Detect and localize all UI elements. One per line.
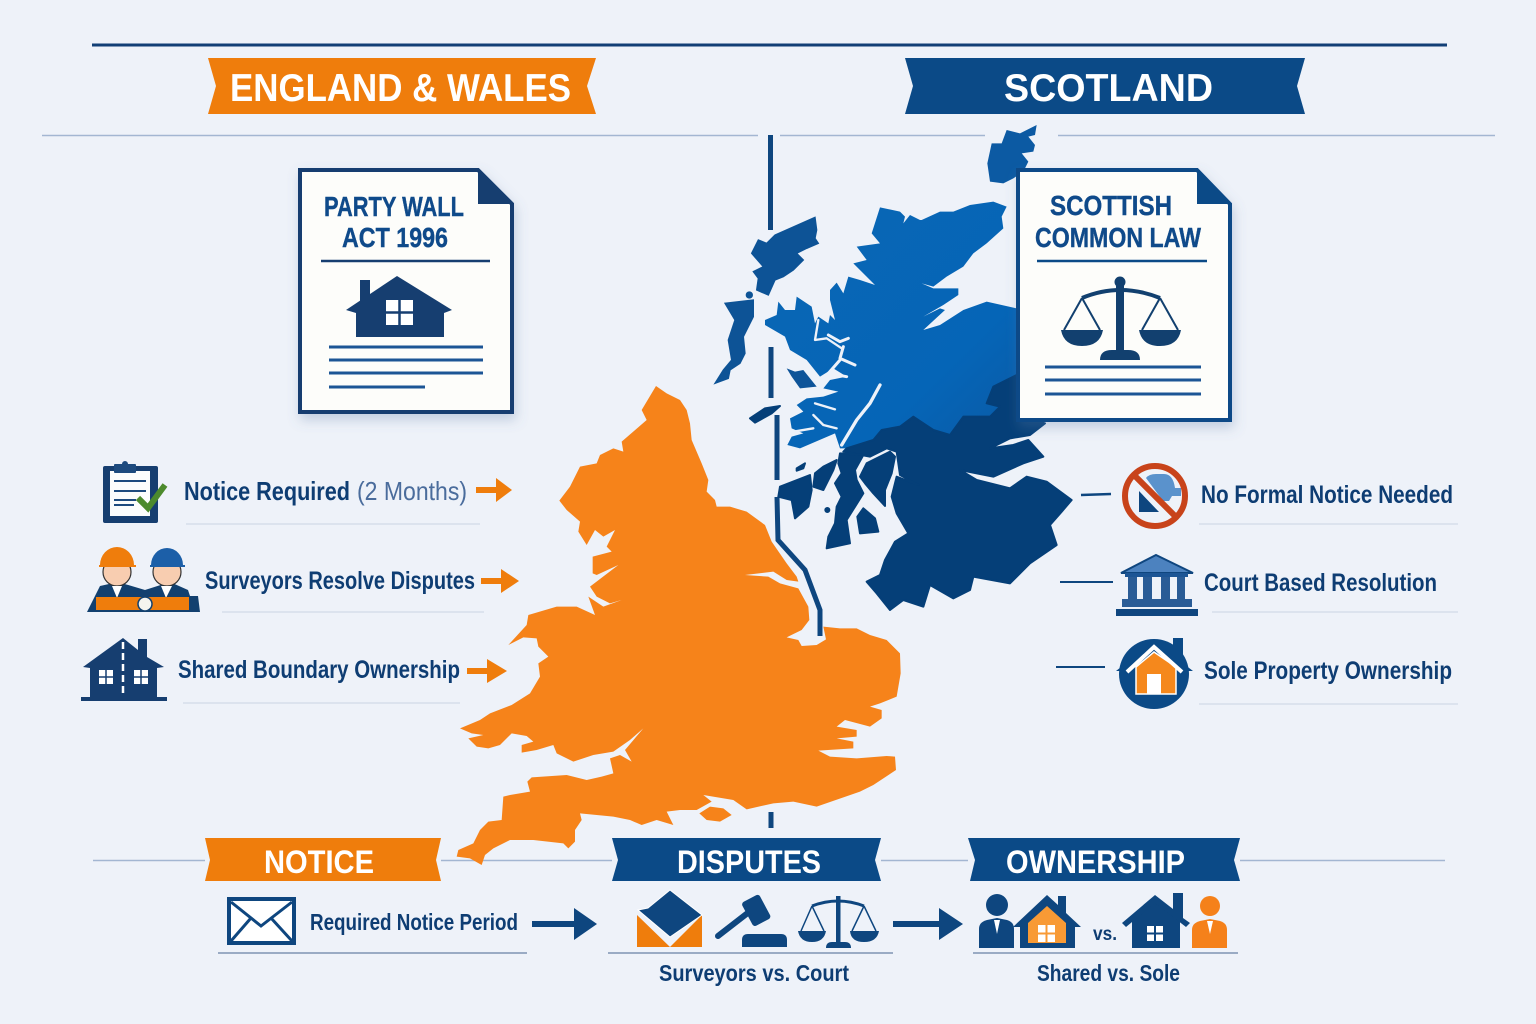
document: Party Wall Act 1996 [300,168,514,412]
icon: person orange [1192,896,1227,948]
banner: Ownership: OWNERSHIP [1006,844,1185,880]
left item: Surveyors Resolve Disputes [87,547,519,612]
icon: house [346,276,452,337]
left item: Surveyors Resolve Disputes: Surveyors Resolve Disputes [205,567,475,595]
banner: Ownership [968,838,1240,881]
icon: no notice sign [1125,466,1185,526]
panel: Ownership: Shared vs. Sole [1037,960,1180,986]
arrow [893,908,963,940]
icon: house with orange front [1013,895,1081,948]
right item: Sole Property Ownership [1056,638,1458,709]
panel: Notice: Required Notice Period [310,909,518,935]
document: Party Wall Act 1996: PARTY WALL [324,191,464,222]
banner: England & Wales: ENGLAND & WALES [230,67,571,110]
icon: scales of justice [1061,277,1181,360]
arrow [481,569,519,593]
icon: shared house [81,638,167,701]
document: Scottish Common Law: SCOTTISH [1050,190,1172,221]
right item: Court Based Resolution: Court Based Resolution [1204,569,1437,597]
left item: Notice Required: Notice Required [184,476,350,506]
arrow [476,478,512,502]
left item: Notice Required [103,461,512,524]
panel: Notice [205,838,597,953]
document: Scottish Common Law [1018,168,1232,420]
arrow [532,908,597,940]
left item: Shared Boundary Ownership: Shared Boundary Ownership [178,656,460,684]
panel: Ownership: vs. [1093,924,1117,945]
banner: Scotland [905,58,1305,114]
right item: Court Based Resolution [1060,555,1458,616]
right item: Sole Property Ownership: Sole Property Ownership [1204,657,1452,685]
right item: No Formal Notice Needed: No Formal Notice Needed [1201,481,1453,509]
icon: two surveyors [87,547,200,612]
banner: Notice [205,838,441,881]
text lines [1045,367,1201,394]
document: Party Wall Act 1996: ACT 1996 [342,222,448,253]
icon: gavel [718,894,787,947]
text lines [329,347,483,387]
map: Outer Hebrides [715,217,818,383]
banner: Notice: NOTICE [264,844,374,880]
map: border line between nations [770,135,820,828]
icon: scales [798,896,879,948]
map: Scotland [715,125,1072,610]
icon: envelope [229,899,294,943]
icon: sole house [1116,638,1193,709]
panel: Disputes [608,838,963,986]
document: Scottish Common Law: COMMON LAW [1035,222,1201,253]
left item: Shared Boundary Ownership [81,638,507,703]
map: sea lochs [793,320,880,445]
banner: Disputes [612,838,881,881]
icon: house navy [1122,893,1190,948]
icon: person navy [979,894,1014,948]
arrow [467,659,507,683]
icon: courthouse [1116,555,1198,616]
map: England and Wales [457,386,901,865]
map: southern Scotland [750,375,1072,610]
right item: No Formal Notice Needed [1081,466,1458,526]
panel: Ownership [968,838,1240,986]
banner: Scotland: SCOTLAND [1004,67,1213,110]
map: Highlands [765,125,1037,448]
icon: clipboard with check [103,461,165,523]
left item: Notice Required: (2 Months) [357,476,467,506]
banner: Disputes: DISPUTES [677,844,821,880]
panel: Disputes: Surveyors vs. Court [659,960,849,986]
icon: open envelope [637,890,702,947]
